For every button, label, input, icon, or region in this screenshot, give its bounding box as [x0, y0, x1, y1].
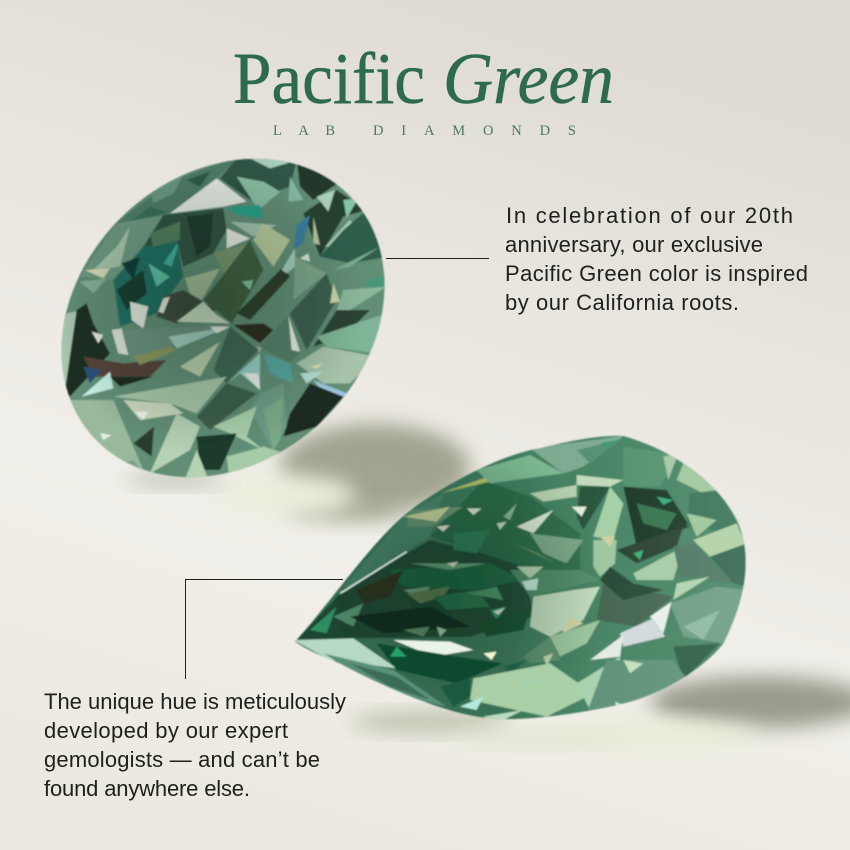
- shadow: round diamond: [125, 424, 470, 522]
- title: Pacific Green logo: Pacific: [233, 38, 425, 119]
- leader line: pear diamond: [186, 580, 343, 679]
- text block: anniversary: anniversary, our exclusive: [505, 232, 763, 257]
- text block: unique hue: found anywhere else.: [44, 776, 250, 801]
- text block: anniversary: [505, 203, 808, 315]
- text block: unique hue: gemologists — and can’t be: [44, 747, 320, 772]
- icon: pear green diamond: [290, 430, 760, 730]
- text block: unique hue: The unique hue is meticulously: [44, 689, 346, 714]
- shadow: pear diamond: [350, 676, 850, 749]
- text block: anniversary: by our California roots.: [505, 290, 739, 315]
- subtitle: Lab Diamonds: DIAMONDS: [373, 123, 576, 139]
- title: Pacific Green logo: Green: [443, 38, 614, 119]
- subtitle: Lab Diamonds: [273, 123, 576, 139]
- icon: round green diamond: [60, 158, 386, 478]
- text block: unique hue: [44, 689, 346, 801]
- leader line: round diamond: [386, 258, 489, 260]
- subtitle: Lab Diamonds: LAB: [273, 123, 335, 139]
- text block: unique hue: developed by our expert: [44, 718, 288, 743]
- title: Pacific Green logo: [233, 38, 614, 119]
- text block: anniversary: Pacific Green color is inspired: [505, 261, 808, 286]
- text block: anniversary: In celebration of our 20th: [506, 203, 793, 228]
